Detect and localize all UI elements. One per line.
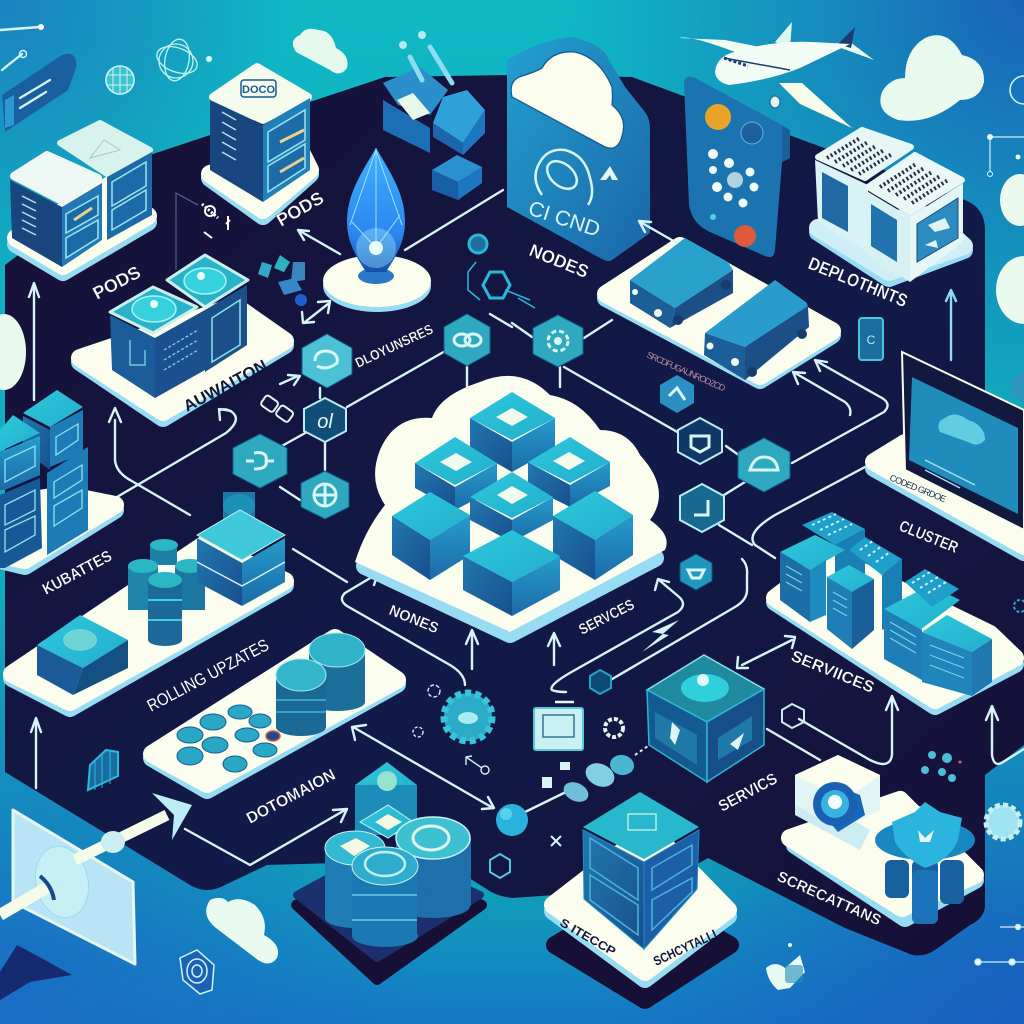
blue seal: [813, 782, 865, 832]
panel: top pods server: [210, 67, 310, 216]
label: deployments small: DLOYUNSRES: [353, 321, 435, 371]
label: nones: NONES: [387, 602, 441, 637]
small faded caption: SRCDFUGAUNRODZCD: [645, 350, 727, 394]
server back box: [60, 123, 152, 240]
shadow: [0, 945, 72, 1000]
rack back with keyboard 1: [802, 512, 865, 600]
panel: connector plate with pipe: [0, 793, 192, 1000]
icon: edge gear: [986, 600, 1024, 839]
node ball and pills: [496, 746, 648, 836]
label: security: SCRECATTANS: [774, 868, 884, 929]
front cylinder: [352, 847, 418, 947]
panel: phone tile: [684, 77, 790, 257]
hexagon: shield: [678, 418, 722, 464]
hexagon: node right: [738, 438, 790, 492]
arrow: crystal to pods: [298, 230, 340, 254]
arrow: vans to cloud tile: [639, 221, 677, 243]
tower box: [197, 492, 285, 606]
hexagon: small shape: [660, 375, 694, 413]
panel: central cloud with nodes: [355, 376, 667, 634]
green box: [37, 615, 128, 695]
line: small hex to arrow: [767, 696, 1024, 764]
rack C: [884, 585, 960, 680]
hexagon: ol: [304, 398, 346, 442]
arrow: up to deployments: [946, 290, 956, 360]
icon: mailbox: [766, 943, 805, 990]
rear tower: [355, 762, 417, 835]
rack A: [780, 535, 845, 622]
hexagon: plus: [301, 471, 349, 519]
panel: cylinder cluster on dark base: [296, 762, 482, 980]
red badge: [266, 731, 280, 741]
server front box: [10, 155, 102, 267]
panel: security platform: [790, 755, 975, 924]
panel: monitor on platform: [874, 352, 1024, 552]
panel: kubernetes stack left: [0, 390, 115, 568]
blue badge: [741, 122, 763, 144]
rack back with keyboard 2: [849, 537, 902, 630]
label: services right: SERVIICES: [789, 648, 877, 697]
icon: chain link: [260, 394, 294, 423]
small box: [432, 155, 482, 200]
label: bottom platform text right: SCHCYTALLI: [651, 926, 719, 969]
icon: gear + sparkle: [202, 204, 230, 238]
icon: small tablet: [859, 318, 883, 360]
icon: sparkle cluster: [921, 751, 962, 782]
label: services center: SERVCES: [576, 596, 637, 639]
tile label: CI CND: [525, 197, 603, 242]
left cylinder: [325, 831, 385, 928]
cylinder pair: [276, 633, 365, 736]
label: pods top: PODS: [273, 188, 327, 230]
icon: left edge cloud: [0, 314, 26, 390]
icon: small tablet: C: [867, 333, 876, 347]
panel: deployment servers: [815, 130, 964, 282]
pillars: [885, 860, 964, 924]
node cube lower left: [392, 492, 470, 580]
hexagon: slash: [680, 484, 724, 532]
label: kubernetes: KUBATTES: [40, 548, 115, 599]
mid tile: [360, 805, 413, 838]
icon: tiny badge bottom left: [490, 854, 510, 878]
node cube right: [528, 437, 610, 507]
panel: cluster platform: [775, 512, 1015, 706]
icon: gear: [444, 693, 492, 741]
arrow: services to cluster: [737, 636, 795, 668]
icon: small gear: [605, 719, 623, 737]
right cylinder: [396, 817, 471, 918]
node cube top: [470, 392, 555, 472]
icon: gears cluster: [468, 235, 535, 308]
panel: rolling updates platform: [12, 492, 285, 708]
label: services lower: SERVICS: [716, 770, 781, 816]
panel: automation module: [80, 255, 285, 418]
shield: [875, 802, 975, 868]
server 2: [865, 155, 963, 282]
panel: keypad platform: [152, 633, 397, 790]
arrow: small to hexagon: [280, 375, 300, 385]
rack B: [827, 565, 874, 649]
panel: vans on platform: [606, 238, 832, 380]
arrow: double headed diagonal: [302, 301, 330, 323]
panel: left pods servers: [10, 123, 152, 272]
van 2: [704, 280, 809, 380]
icon: small star cluster: [258, 255, 307, 306]
server stack back: [23, 390, 88, 555]
cylinder stack: [128, 539, 205, 646]
icon: small hex node: [782, 704, 804, 728]
keyboard 3: [905, 569, 959, 607]
label: bottom platform text: S ITECCP: [558, 915, 618, 959]
hexagon: node icon left: [302, 334, 352, 388]
decorative network bottom right: [975, 924, 1024, 965]
van 1: [630, 238, 733, 328]
node cube bottom: [463, 530, 560, 616]
label: automation: AUWAITON: [181, 357, 270, 416]
hexagon: connector left: [233, 434, 287, 488]
icon: little plane: [600, 166, 618, 180]
node cube lower right: [553, 491, 633, 580]
thin bracket line: [176, 193, 198, 270]
arrows: services swoosh: [548, 559, 747, 692]
icon: right edge box: [1012, 370, 1024, 402]
small icons around gear: [413, 685, 489, 774]
panel: box cluster top: [383, 31, 485, 200]
icon: right edge clouds: [996, 174, 1024, 324]
hexagon: node upper right: [533, 315, 583, 367]
label: cluster: CLUSTER: [897, 518, 961, 557]
server tag: [241, 80, 276, 97]
hexagon: ol: ol: [317, 411, 333, 433]
rack D: [922, 615, 992, 696]
white block: [795, 755, 880, 850]
icon: atom rings: [153, 37, 212, 83]
icon: top cloud: [293, 29, 348, 74]
orange badge: [705, 104, 731, 130]
tiny marks: [542, 762, 570, 846]
keypad buttons: [177, 705, 277, 772]
icon: gate: [88, 750, 118, 790]
label: pods left: PODS: [89, 262, 144, 304]
node cube left: [415, 437, 497, 510]
module right: [167, 255, 248, 372]
icon: top right cloud: [880, 35, 984, 121]
line: crystal to top right: [405, 190, 503, 250]
white cloud shape: [511, 52, 624, 148]
hexagon small near services: [590, 670, 611, 694]
label: deployments: DEPLOTHNTS: [806, 253, 910, 311]
icon: airplane: [679, 22, 874, 128]
server 1: [815, 130, 911, 252]
platform caption: CODED GRDOE: [888, 473, 948, 504]
label: nodes top: NODES: [527, 240, 591, 282]
hexagon: small cart: [680, 554, 712, 590]
hexagon: node upper left: [444, 314, 490, 366]
panel: cloud CI/CD tile: [507, 37, 650, 261]
panel: services cube: [647, 655, 764, 782]
screen cloud: [938, 414, 985, 445]
icon: fingerprint badge: [180, 950, 214, 994]
decorative network top right: [987, 76, 1024, 176]
icon: bottom cloud: [206, 898, 278, 964]
red button: [734, 225, 756, 247]
connector lines: [29, 283, 888, 865]
icon: small cloud logo: [535, 150, 592, 205]
server tag: DOCO: [242, 84, 275, 96]
panel: bottom cube platform: [553, 792, 728, 979]
label: automation lower: DOTOMAION: [244, 767, 338, 828]
icon: globe: [106, 66, 134, 94]
icon: crystal drop on base: [323, 148, 431, 312]
node cube center: [470, 472, 553, 542]
dotted network: [708, 149, 758, 208]
server stack front: [0, 415, 42, 568]
module left: [110, 287, 205, 398]
icon: service window: [534, 702, 583, 750]
label: rolling updates: ROLLING UPZATES: [144, 635, 272, 716]
decorative top-left UI card: [0, 24, 76, 132]
